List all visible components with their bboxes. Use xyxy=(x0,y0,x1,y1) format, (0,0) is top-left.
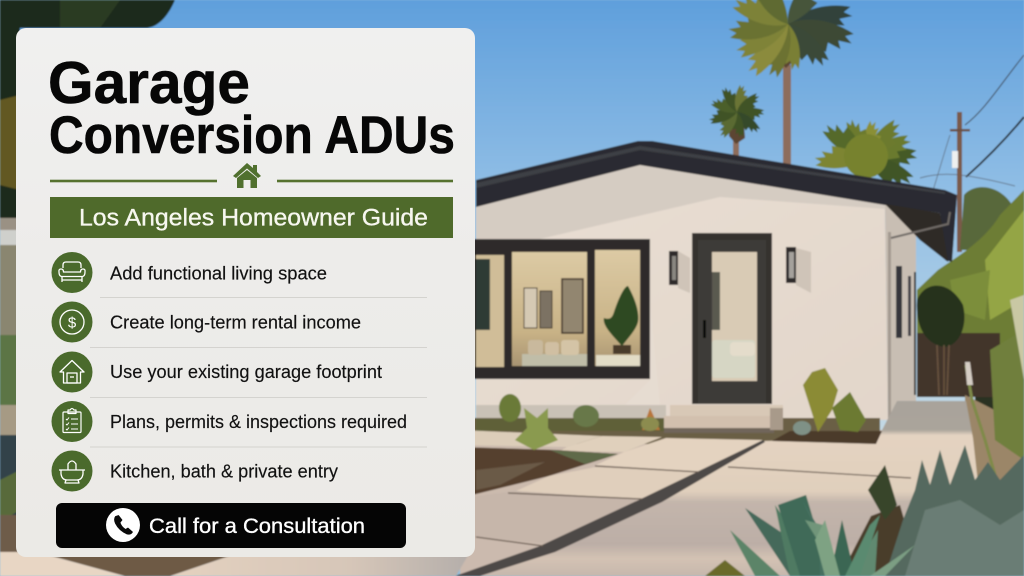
house wall xyxy=(476,163,916,422)
benefit: rental income xyxy=(52,302,361,342)
palm tree: behind roof xyxy=(814,116,918,193)
benefit: plans and permits: Plans, permits & inspections required xyxy=(110,411,407,432)
left strip scenery xyxy=(0,0,470,576)
benefit: living space xyxy=(52,252,327,293)
benefit: kitchen and bath: Kitchen, bath & private entry xyxy=(110,460,339,482)
benefit: living space: Add functional living space xyxy=(110,262,327,283)
benefit: garage footprint xyxy=(52,352,382,392)
subtitle banner xyxy=(50,197,453,238)
call to action button: Call for a Consultation xyxy=(149,514,365,538)
sofa xyxy=(522,340,640,366)
agave plant xyxy=(730,495,915,576)
wall sconces xyxy=(669,247,811,293)
background trees right xyxy=(917,187,1024,576)
icon: phone xyxy=(106,508,140,542)
roof xyxy=(476,141,957,262)
title divider with house icon xyxy=(50,163,453,188)
palm tree: small xyxy=(707,84,764,159)
title: Garage xyxy=(48,50,250,116)
benefit: rental income: $ xyxy=(68,314,77,332)
utility pole and wires xyxy=(920,55,1024,252)
benefit: plans and permits xyxy=(52,401,407,442)
benefit: kitchen and bath xyxy=(52,450,339,492)
entry steps xyxy=(664,405,783,433)
subtitle banner: Los Angeles Homeowner Guide xyxy=(79,204,428,232)
row dividers xyxy=(90,298,427,447)
title xyxy=(48,50,455,165)
title: Conversion ADUs xyxy=(49,106,455,165)
call to action button xyxy=(56,503,406,548)
concrete ground and walkways xyxy=(455,401,979,576)
front yard plants xyxy=(499,368,866,450)
wall art xyxy=(524,279,583,333)
large window xyxy=(470,239,650,379)
potted plant xyxy=(604,286,638,354)
panel: homeowner guide card xyxy=(16,28,475,557)
palm tree: tall xyxy=(726,0,855,167)
door xyxy=(692,233,772,404)
shrubs right foreground xyxy=(705,445,1024,576)
benefit: rental income: Create long-term rental income xyxy=(110,312,361,332)
sky xyxy=(0,0,1024,440)
benefit: garage footprint: Use your existing garage footprint xyxy=(110,361,382,382)
